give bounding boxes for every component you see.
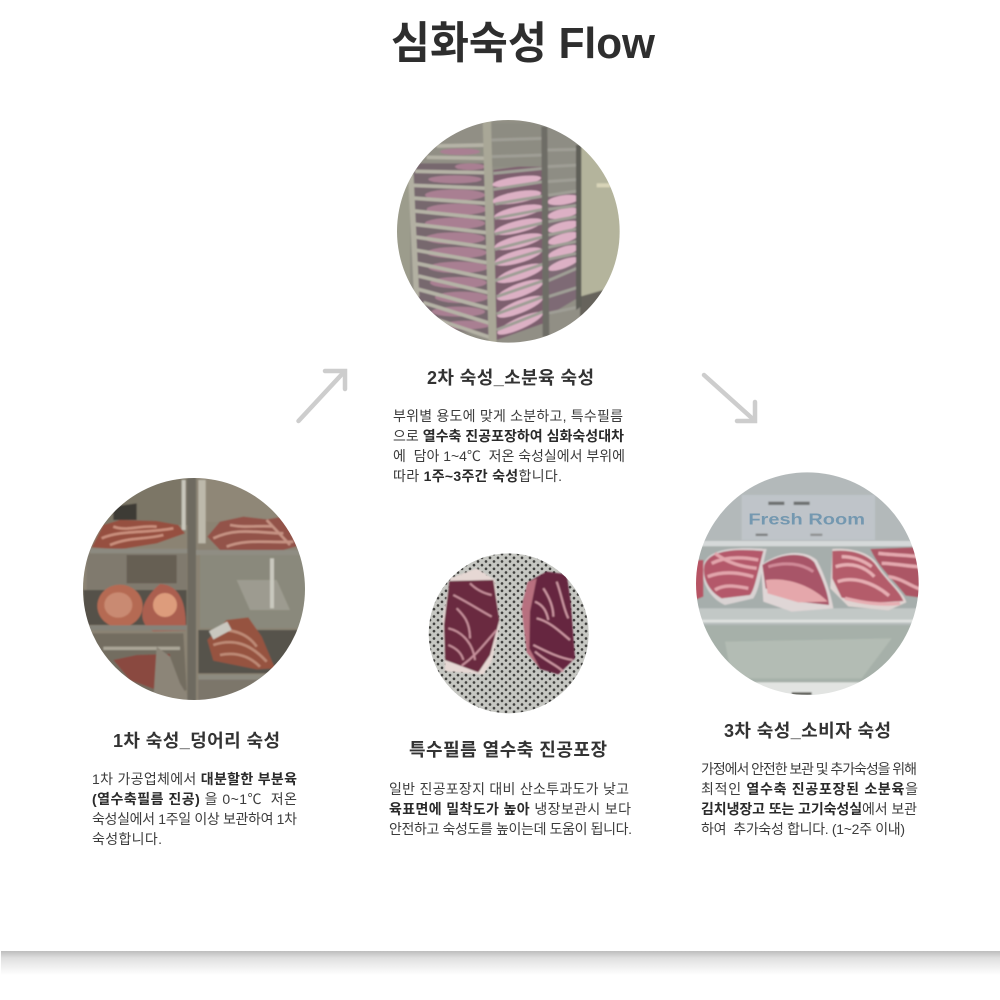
heading: 2차 숙성_소분육 숙성 <box>427 368 594 388</box>
footer shadow band <box>1 951 1000 975</box>
meats <box>703 548 767 605</box>
panel: 3rd aging <box>692 468 925 837</box>
heading: 1차 숙성_덩어리 숙성 <box>113 731 280 751</box>
meat: middle left pair <box>97 585 143 627</box>
panel: 1st aging <box>80 475 310 847</box>
title: 심화숙성 Flow <box>391 19 656 68</box>
arrow: up right <box>298 371 345 421</box>
panel: 2nd aging <box>393 117 627 484</box>
heading: 특수필름 열수축 진공포장 <box>409 740 607 760</box>
posts <box>483 120 497 343</box>
meat: bottom left <box>113 654 170 690</box>
panel: vacuum packaging <box>389 552 632 837</box>
body text: 1차 가공업체에서 대분할한 부분육 <box>92 771 297 787</box>
body text: 숙성합니다. <box>92 831 162 847</box>
body text <box>393 408 625 484</box>
meat: top left <box>92 520 185 549</box>
body text: (열수축필름 진공) 을 0~1℃ 저온 <box>92 791 297 807</box>
body text <box>389 781 632 837</box>
body text: 일반 진공포장지 대비 산소투과도가 낮고 <box>389 781 629 797</box>
meat: top right <box>207 517 302 550</box>
body text: 안전하고 숙성도를 높이는데 도움이 됩니다. <box>389 821 632 837</box>
body text: 따라 1주~3주간 숙성합니다. <box>393 468 562 484</box>
body text: 김치냉장고 또는 고기숙성실에서 보관 <box>701 801 917 817</box>
body text <box>92 771 297 847</box>
body text: 부위별 용도에 맞게 소분하고, 특수필름 <box>393 408 623 424</box>
body text: 숙성실에서 1주일 이상 보관하여 1차 <box>92 811 297 827</box>
shelves and posts <box>90 549 188 553</box>
body text: 육표면에 밀착도가 높아 냉장보관시 보다 <box>389 801 631 817</box>
body text: 가정에서 안전한 보관 및 추가숙성을 위해 <box>701 761 917 777</box>
left shelves <box>412 145 490 337</box>
photo: two vacuum packed steaks on perforated tray <box>427 552 590 715</box>
photo: packed cuts in refrigerator drawer: Fresh Room <box>748 511 865 528</box>
meat: lower right <box>207 617 275 669</box>
body text: 에 담아 1~4℃ 저온 숙성실에서 부위에 <box>393 448 625 464</box>
middle shelves <box>492 138 580 330</box>
heading: 3차 숙성_소비자 숙성 <box>724 721 891 741</box>
body text: 최적인 열수축 진공포장된 소분육을 <box>701 781 918 797</box>
body text: 하여 추가숙성 합니다. (1~2주 이내) <box>701 821 905 837</box>
photo: primal cuts in aging cabinet <box>80 475 310 707</box>
left shelf contents <box>425 148 490 329</box>
body text: 으로 열수축 진공포장하여 심화숙성대차 <box>393 428 624 444</box>
body text <box>701 761 918 837</box>
photo: meat trays on rack <box>393 117 627 350</box>
arrow: down right <box>704 375 755 421</box>
photo: packed cuts in refrigerator drawer <box>692 468 925 702</box>
